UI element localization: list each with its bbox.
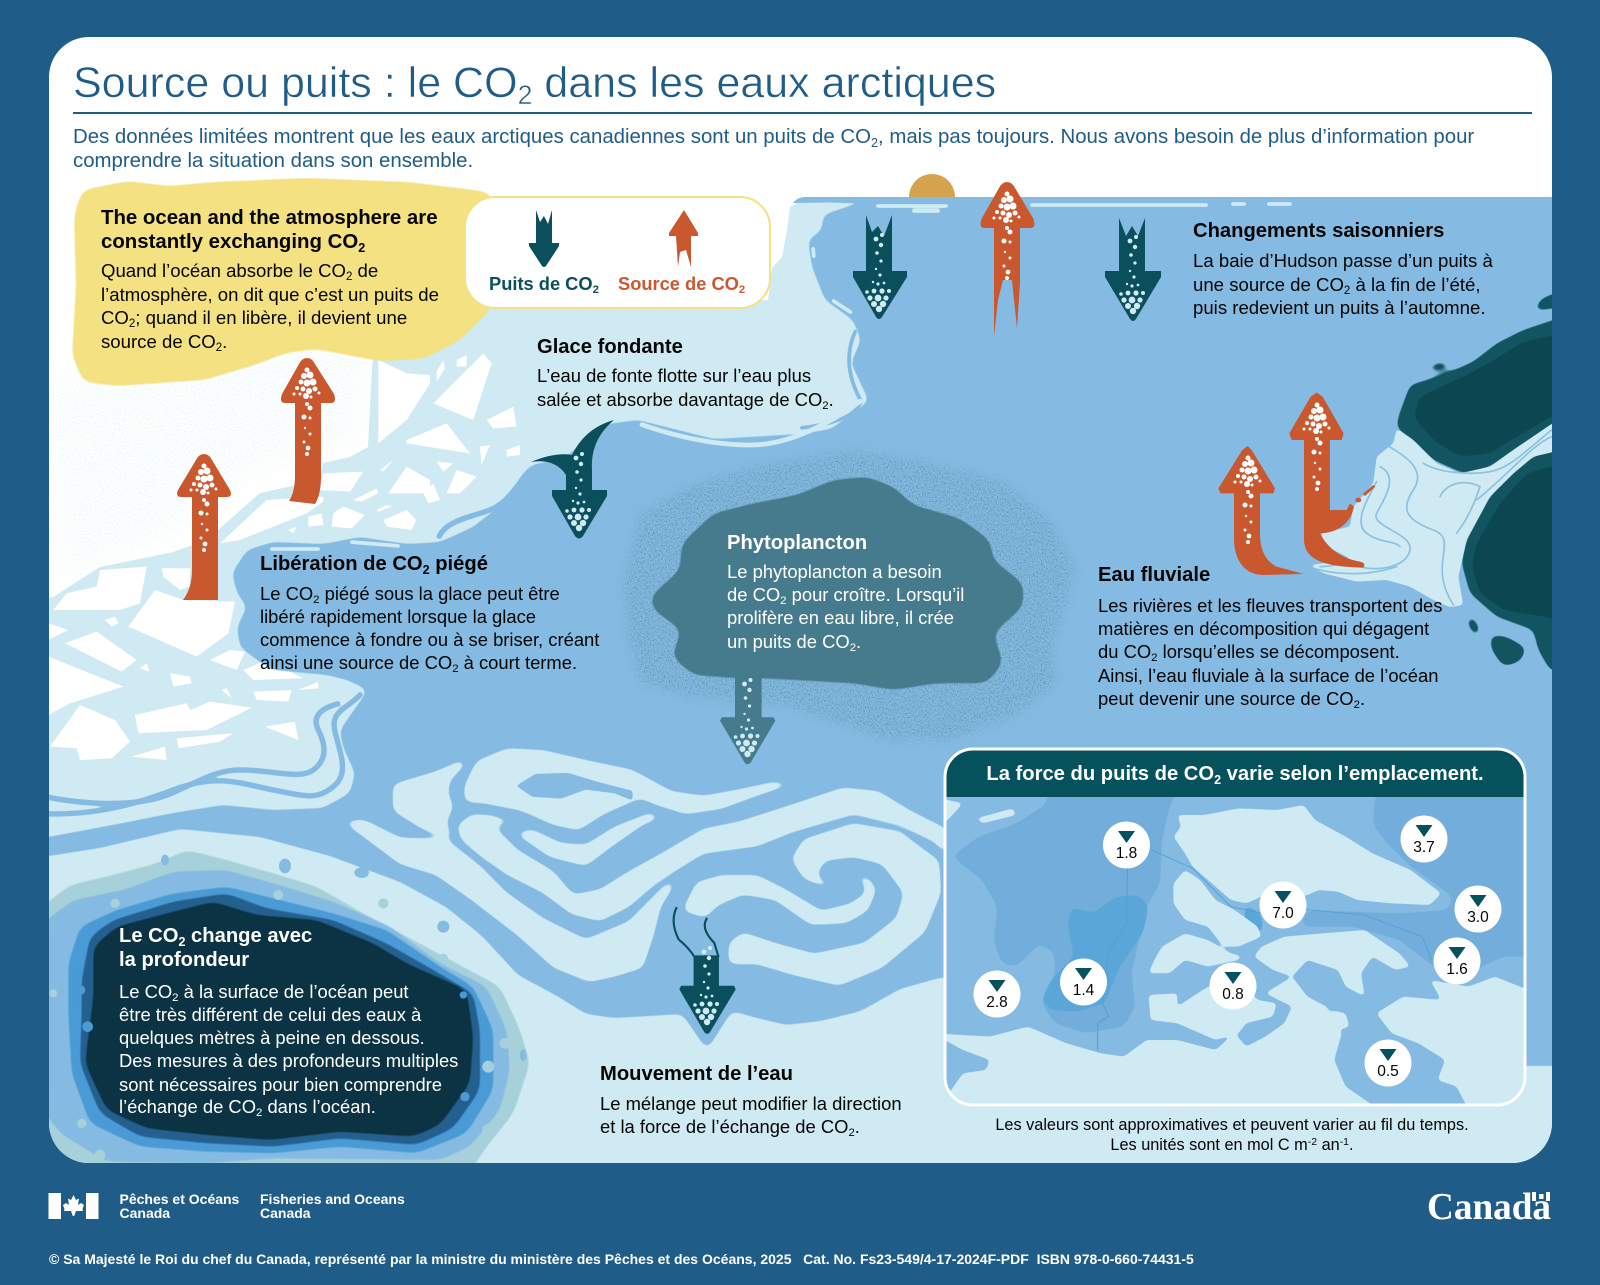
badge 1.6 [1434, 938, 1480, 984]
arrow: sink, melting ice [531, 420, 614, 538]
yellow blob [72, 178, 510, 386]
text: depth [119, 925, 458, 1119]
phytoplankton blob [650, 477, 1023, 690]
legend labels: Puits de CO2 [489, 273, 599, 296]
dark land interior [1415, 336, 1552, 618]
text: melting ice: Glace fondante [537, 336, 683, 358]
text: ice release: commence à fondre ou à se briser, créant [260, 629, 599, 650]
text: ice release [260, 553, 599, 675]
ice floes [48, 353, 520, 760]
panel: legend: Source de CO2 [618, 273, 745, 296]
border lines [1098, 850, 1432, 1050]
badge 3.7 [1400, 816, 1448, 862]
text: phytoplankton: prolifère en eau libre, il crée [727, 607, 954, 628]
sun [909, 174, 955, 197]
badge 7.0 [1260, 882, 1306, 928]
badge 0.8 [1210, 962, 1256, 1010]
water strip along horizon [793, 197, 858, 204]
badge 0.5 [1364, 1040, 1412, 1086]
text: water movement: et la force de l’échange de CO2. [600, 1116, 860, 1139]
map caption: Les valeurs sont approximatives et peuvent varier au fil du temps. [995, 1116, 1469, 1134]
text: phytoplankton: de CO2 pour croître. Lorsqu’il [727, 584, 964, 607]
strongest sink contours [1041, 895, 1263, 1012]
badge 1.8: 1.8 [1116, 845, 1137, 862]
badge 1.6: 1.6 [1446, 961, 1468, 978]
pale highlights on water [270, 204, 1292, 549]
dark coastal land [1397, 290, 1563, 673]
footer: government signature: Canada [260, 1205, 311, 1221]
arrow: sink, water movement [674, 907, 736, 1034]
swirl eye [517, 773, 632, 800]
text: river water: Les rivières et les fleuves transportent des [1098, 595, 1442, 616]
text: water movement [600, 1063, 902, 1139]
river delta [1308, 422, 1555, 607]
map frame [945, 749, 1525, 1105]
icon: Canadian flag [48, 1193, 98, 1219]
map header band [945, 749, 1525, 797]
icon: source arrow [669, 210, 698, 267]
text: seasonal changes: une source de CO2 à la fin de l’été, [1193, 274, 1481, 297]
badge 1.4: 1.4 [1073, 982, 1095, 999]
badge 0.8: 0.8 [1222, 986, 1244, 1003]
text: river water [1098, 564, 1442, 711]
arrow: sink, phytoplankton [720, 673, 775, 764]
panel: sink strength map [932, 749, 1537, 1117]
depth ring: navy [80, 893, 480, 1147]
text: melting ice [537, 336, 834, 412]
yellow body: CO2; quand il en libère, il devient une [101, 307, 407, 330]
text: melting ice: L’eau de fonte flotte sur l’eau plus [537, 365, 811, 386]
badge 3.0 [1454, 886, 1502, 932]
text: ice release: Le CO2 piégé sous la glace peut être [260, 583, 560, 606]
text: water movement: Mouvement de l’eau [600, 1063, 793, 1085]
copyright line: © Sa Majesté le Roi du chef du Canada, représenté par la ministre du ministère des Pêches et des Océans, 2025 Cat. No. Fs23-549/4-17-2024F-PDF ISBN 978-0-660-74431-5 [49, 1251, 1194, 1267]
text: river water: Eau fluviale [1098, 564, 1210, 586]
arrow: source, ice right [281, 358, 335, 504]
text: ice release: ainsi une source de CO2 à court terme. [260, 652, 577, 675]
footer: government signature: Canada [120, 1205, 170, 1221]
text: depth: quelques mètres à peine en dessous. [119, 1027, 425, 1048]
arrows: source, river water [1218, 393, 1375, 575]
text: depth: être très différent de celui des eaux à [119, 1004, 422, 1025]
arrow: sink, season left [853, 215, 907, 319]
title rule [73, 112, 1532, 114]
text: river water: Ainsi, l’eau fluviale à la surface de l’océan [1098, 665, 1438, 686]
swirling pale water bands [342, 748, 946, 986]
panel: yellow intro: constantly exchanging CO2 [101, 231, 365, 255]
text: depth: sont nécessaires pour bien comprendre [119, 1074, 442, 1095]
map caption: . [1349, 1136, 1354, 1154]
subtitle [73, 126, 1474, 172]
department names: Pêches et Océans [120, 1191, 240, 1207]
text: river water: peut devenir une source de CO2. [1098, 688, 1365, 711]
text: melting ice: salée et absorbe davantage de CO2. [537, 389, 834, 412]
arrow: sink, season right [1105, 218, 1161, 321]
text: depth: Des mesures à des profondeurs multiples [119, 1050, 458, 1071]
yellow heading: The ocean and the atmosphere are [101, 207, 438, 229]
map caption: Les unités sont en mol C m [1110, 1136, 1308, 1154]
text: river water: matières en décomposition qui dégagent [1098, 618, 1429, 639]
title: Source ou puits : le CO2 dans les eaux arctiques [73, 59, 996, 110]
panel: legend [465, 197, 770, 308]
badge 3.7: 3.7 [1413, 839, 1435, 856]
map caption: -2 [1308, 1136, 1317, 1148]
snow field [49, 300, 373, 598]
footer: government signature [48, 1191, 405, 1221]
text: phytoplankton: Le phytoplancton a besoin [727, 561, 942, 582]
badge 2.8: 2.8 [986, 994, 1008, 1011]
yellow body: Quand l’océan absorbe le CO2 de [101, 260, 378, 283]
map caption [995, 1116, 1469, 1154]
footer: government signature: Fisheries and Oceans [260, 1191, 405, 1207]
text: depth: Le CO2 change avec [119, 925, 312, 948]
depth ring: outer teal [33, 850, 530, 1177]
arrow: source, ice left [177, 454, 231, 600]
map caption: an [1317, 1136, 1340, 1154]
bubbles [49, 855, 527, 1160]
text: phytoplankton [727, 532, 964, 654]
open water [30, 170, 1570, 1066]
map heading: La force du puits de CO2 varie selon l’emplacement. [986, 763, 1484, 786]
text: depth: l’échange de CO2 dans l’océan. [119, 1096, 376, 1119]
text: depth: la profondeur [119, 949, 249, 971]
text: depth: Le CO2 à la surface de l’océan peut [119, 981, 409, 1004]
pale ice base [40, 197, 1560, 1170]
badge 1.4 [1060, 958, 1107, 1006]
text: ice release: Libération de CO2 piégé [260, 553, 488, 576]
text: ice release: libéré rapidement lorsque la glace [260, 606, 536, 627]
badge 7.0: 7.0 [1272, 905, 1294, 922]
subtitle: Des données limitées montrent que les eaux arctiques canadiennes sont un puits de CO2, mais pas toujours. Nous avons besoin de plus d’information pour [73, 126, 1474, 150]
badge 0.5: 0.5 [1377, 1063, 1399, 1080]
text: river water: du CO2 lorsqu’elles se décomposent. [1098, 641, 1400, 664]
icon: sink arrow [529, 210, 559, 267]
yellow body: l’atmosphère, on dit que c’est un puits de [101, 284, 439, 305]
arrow: source, season [981, 182, 1034, 336]
badge 2.8 [974, 970, 1020, 1018]
text: phytoplankton: un puits de CO2. [727, 631, 861, 654]
map caption: -1 [1340, 1136, 1349, 1148]
deep water panel [85, 902, 473, 1140]
yellow body [101, 260, 439, 354]
text: seasonal changes: puis redevient un puits à l’automne. [1193, 297, 1486, 318]
depth ring: mid blue [68, 887, 493, 1153]
text: phytoplankton: Phytoplancton [727, 532, 867, 554]
phytoplankton stipple halo [623, 450, 1077, 740]
subtitle: comprendre la situation dans son ensemble. [73, 150, 473, 172]
sink contours [951, 790, 1537, 1033]
text: seasonal changes [1193, 220, 1493, 318]
coastal current lines [37, 330, 861, 814]
depth ring: light blue [33, 870, 510, 1163]
panel: yellow intro [72, 178, 510, 386]
map base [945, 749, 1525, 1105]
text: water movement: Le mélange peut modifier la direction [600, 1093, 902, 1114]
Canada wordmark: Canada [1427, 1186, 1551, 1228]
delta channels [1313, 430, 1552, 605]
badge 3.0: 3.0 [1467, 909, 1489, 926]
yellow body: source de CO2. [101, 331, 227, 354]
badge 1.8 [1103, 822, 1150, 868]
text: seasonal changes: La baie d’Hudson passe d’un puits à [1193, 250, 1493, 271]
land masses [932, 797, 1537, 1117]
text: seasonal changes: Changements saisonniers [1193, 220, 1444, 242]
